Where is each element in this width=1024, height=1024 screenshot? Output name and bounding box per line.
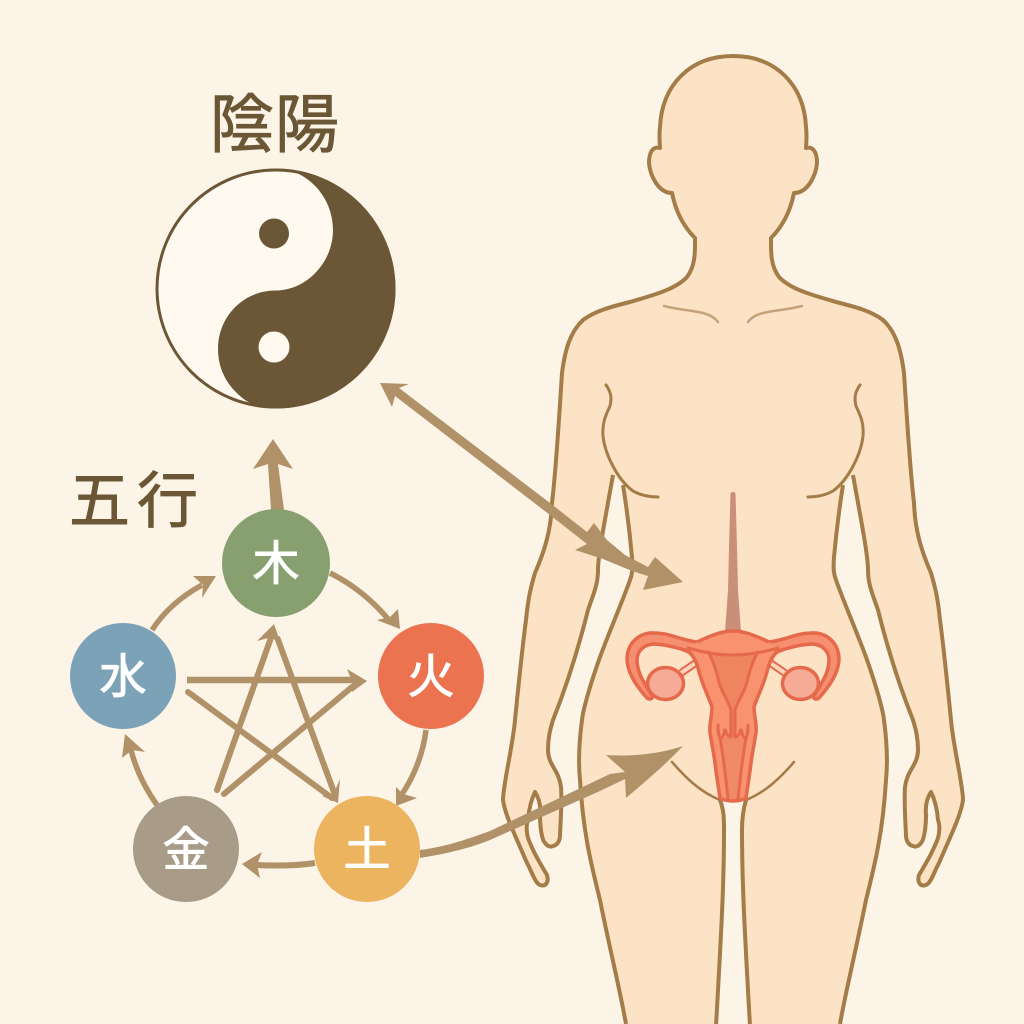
arrow: wood up to yin-yang [253,439,293,510]
arrow: water to wood [152,576,216,630]
arrow: metal to water [122,734,157,805]
arrow: earth to metal [242,852,315,878]
element: earth [314,796,420,902]
element: fire [378,623,484,729]
midline stripe above uterus [725,492,741,632]
left half of body [503,56,733,1024]
element: wood [222,509,330,617]
title: five elements: 五行 [69,467,198,535]
arrow: wood to fire [330,573,400,629]
element: metal: 金 [162,823,210,876]
uterus right half [733,631,839,801]
element: fire: 火 [408,650,454,703]
element: earth: 土 [344,823,390,876]
uterus left half [627,631,733,801]
element circles [70,509,484,902]
right half of body [733,56,963,1024]
gap between legs [716,800,750,1024]
arrow: fire to earth [396,730,426,806]
element: metal [133,796,239,902]
pentagram control-cycle arrows [187,624,367,803]
arrow: earth to pelvis [420,746,683,858]
element: water: 水 [100,650,146,703]
five elements cycle arrows [122,439,426,878]
title: yin yang: 陰陽 [210,89,339,161]
human body silhouette [503,56,963,1024]
element: wood: 木 [252,537,300,590]
arrow: yin-yang to abdomen double-headed [380,383,683,590]
element: water [70,623,176,729]
yin-yang symbol [157,168,396,408]
uterus diagram [627,631,839,801]
